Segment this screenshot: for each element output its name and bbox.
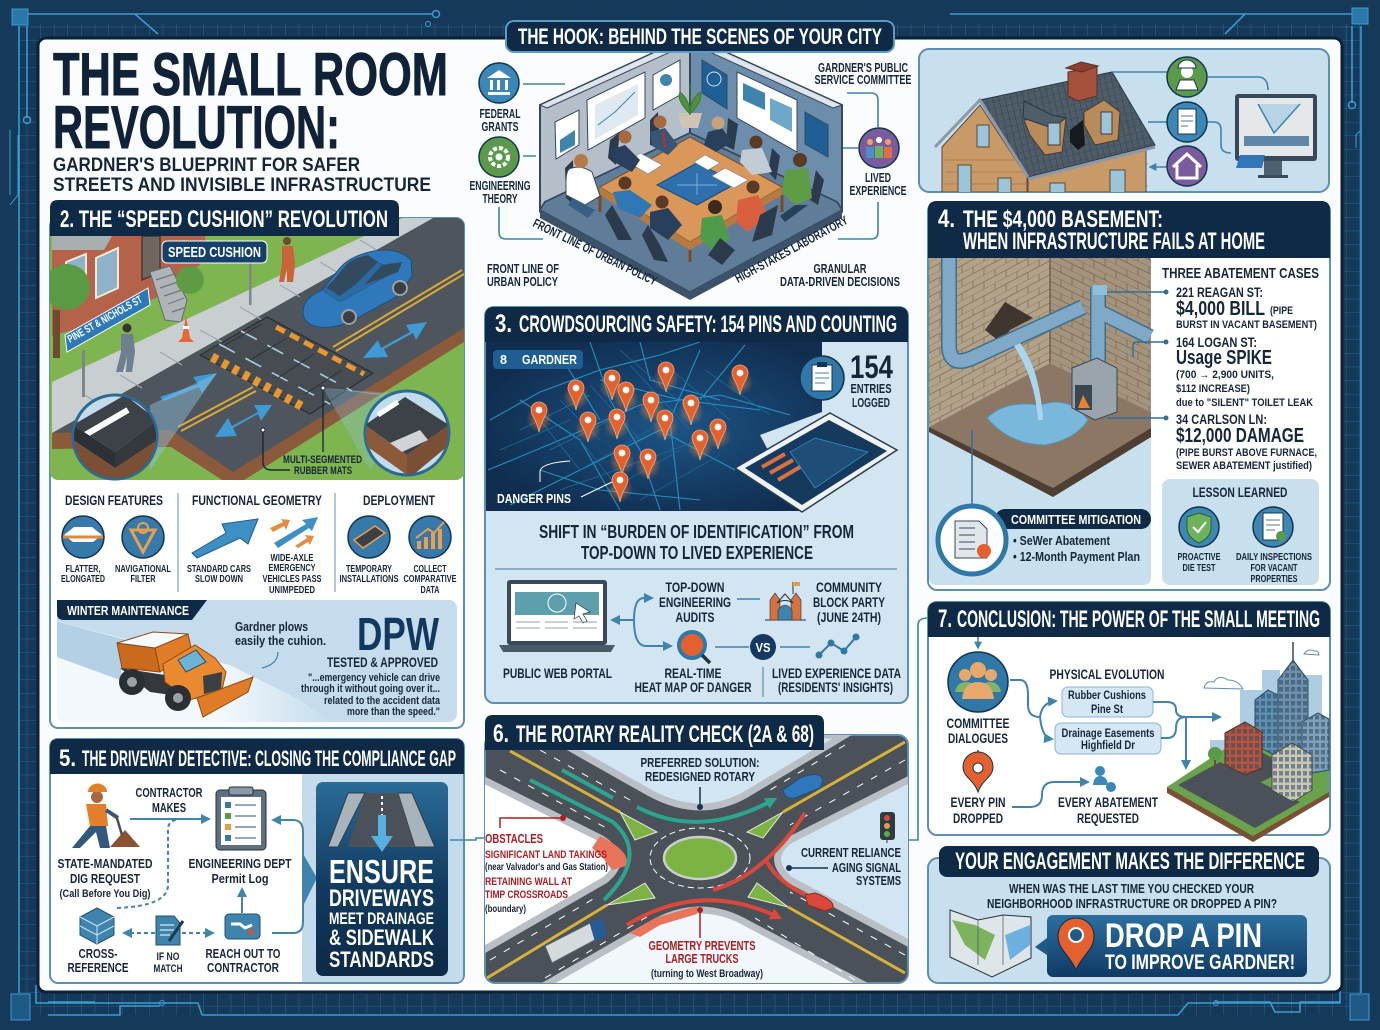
header: conclusion: 7. [938,605,952,633]
icon: document and pen [156,916,183,945]
angled labels [531,213,851,289]
panel: winter maintenance: Gardner plows [235,619,308,634]
illustration: isometric meeting room [531,36,851,300]
abatement cases: (PIPE [1270,305,1293,317]
panel: winter maintenance: easily the cuhion. [235,633,326,648]
obstacles callout: OBSTACLES [485,831,543,846]
pedestrians and cone [116,237,295,372]
plant [678,84,702,128]
column: functional geometry [178,492,335,596]
icon: community block party: COMMUNITY [816,580,882,595]
icon: federal grants: FEDERAL [480,106,521,121]
snow plow truck [117,632,253,717]
column: design features: FILTER [130,573,156,585]
lesson learned: FOR VACANT [1250,562,1298,574]
stat: 154 entries: 154 [850,349,893,385]
icon: blue car [303,250,412,327]
versus badge [750,634,776,660]
icon: abatement request: REQUESTED [1077,811,1139,826]
hook labels: SERVICE COMMITTEE [814,73,912,87]
street illustration [44,218,464,487]
panel: roof and inspection [919,49,1329,195]
column: deployment: INSTALLATIONS [340,573,398,585]
title: REVOLUTION: [53,94,340,161]
obstacles callout: SIGNIFICANT LAND TAKINGS [485,849,607,861]
column: functional geometry: SLOW DOWN [195,573,243,585]
mat leader lines and label: RUBBER MATS [294,465,352,477]
icon: engineering theory: ENGINEERING [470,178,530,193]
preferred solution label [640,755,760,810]
signal callout: AGING SIGNAL [832,860,901,875]
icon: monitor with chart [1235,94,1317,178]
header: rotary: THE ROTARY REALITY CHECK (2A & 68) [516,721,814,748]
flow labels: Permit Log [212,871,269,886]
signal callout: CURRENT RELIANCE [801,845,901,860]
panel: engagement call to action [928,846,1330,983]
icon: report [1167,102,1207,142]
street sign: PINE ST & NICHOLS ST [66,294,145,346]
banner: the hook: THE HOOK: BEHIND THE SCENES OF YOUR CITY [518,24,882,49]
icon: database cube [80,908,114,944]
mat leader lines and label: MULTI-SEGMENTED [283,454,362,466]
icon: permit clipboard [216,787,266,850]
column: deployment: COLLECT [414,563,447,575]
hook labels: GARDNER'S PUBLIC [818,61,908,75]
label: top-down audits: AUDITS [676,610,714,625]
header: rotary: 6. [493,720,509,748]
column: design features: DESIGN FEATURES [65,492,163,508]
flow labels: REACH OUT TO [206,946,280,961]
obstacles callout: (near Valvador's and Gas Station) [485,862,608,873]
panel: winter maintenance: related to the accident data [324,695,441,707]
panel: crowdsourcing safety [485,307,908,703]
geometry callout: GEOMETRY PREVENTS [648,938,756,953]
hook labels: GRANULAR [814,261,867,276]
lesson learned: LESSON LEARNED [1192,484,1288,500]
header: crowdsourcing: CROWDSOURCING SAFETY: 154 PINS AND COUNTING [519,311,897,338]
icon: lived experience: LIVED [865,170,891,185]
flow labels: STATE-MANDATED [58,856,152,871]
label: top-down audits [659,580,731,625]
flow labels: CONTRACTOR [207,960,279,975]
geometry callout: LARGE TRUCKS [666,951,739,966]
burden statement [539,522,854,563]
panel: winter maintenance [57,600,457,722]
icon: community block party: BLOCK PARTY [813,595,885,610]
icon: folded map [950,910,1031,977]
danger pin map: GARDNER [522,352,578,367]
abatement cases: $4,000 BILL [1176,298,1265,320]
versus badge: VS [756,640,771,655]
preferred solution label: PREFERRED SOLUTION: [640,755,760,770]
header: crowdsourcing [485,307,908,342]
icon: committee dialogues: COMMITTEE [946,716,1010,731]
abatement cases: SEWER ABATEMENT justified) [1176,460,1312,472]
inspection connectors [1112,72,1268,167]
icon: community block party [765,580,885,625]
label: top-down audits: TOP-DOWN [666,580,724,595]
panel: winter maintenance: TESTED & APPROVED [327,654,438,670]
panel: conclusion [928,602,1330,842]
signal callout: SYSTEMS [856,873,901,888]
physical evolution: PHYSICAL EVOLUTION [1050,667,1164,682]
red route arrows [627,813,813,925]
header: driveway detective: 5. [59,745,76,772]
icon: lived experience data [772,634,901,695]
connectors around the room [499,84,878,239]
flow connectors [978,680,1220,807]
icon: worker digging [72,784,140,848]
header: basement: 4. [938,205,955,233]
committee mitigation: COMMITTEE MITIGATION [1011,512,1141,527]
title: THE SMALL ROOM [53,41,448,108]
header: driveway detective: THE DRIVEWAY DETECTIVE: CLOSING THE COMPLIANCE GAP [82,746,456,771]
abatement cases: Usage SPIKE [1176,347,1272,369]
column: functional geometry: WIDE-AXLE [270,552,314,564]
column: design features [61,492,171,585]
icon: lived experience [850,128,907,198]
icon: home [1167,146,1207,186]
physical evolution: Drainage Easements [1062,726,1155,740]
icon: inspector [1167,57,1207,97]
question: NEIGHBORHOOD INFRASTRUCTURE OR DROPPED A PIN? [987,897,1277,911]
abatement cases: due to "SILENT" TOILET LEAK [1176,397,1313,409]
stat: 154 entries: ENTRIES [850,381,892,396]
icon: lived experience data: LIVED EXPERIENCE DATA [772,665,901,681]
panel: driveway detective [50,739,464,983]
obstacles callout [485,815,608,915]
mat leader lines and label [261,386,362,477]
header: rotary [485,715,824,750]
teal route arrows [530,770,773,900]
title: STREETS AND INVISIBLE INFRASTRUCTURE [53,175,431,196]
icon: pin dropped [950,752,1006,826]
hook labels [487,61,912,289]
callout: ensure driveways: ENSURE [329,853,434,890]
header: basement [928,201,1330,258]
icon: public web portal [499,580,615,681]
flow labels: MATCH [154,963,183,975]
column: deployment [340,492,456,596]
hook labels: URBAN POLICY [487,274,558,289]
callout: ensure driveways [316,782,448,976]
danger pin map: DANGER PINS [497,491,571,506]
question [987,882,1277,911]
icon: community block party: (JUNE 24TH) [817,610,881,625]
abatement cases: 221 REAGAN ST: [1176,285,1263,300]
obstacles callout: (boundary) [485,904,526,915]
speed cushion label: SPEED CUSHION [168,244,261,261]
callout: ensure driveways: DRIVEWAYS [329,885,434,912]
icon: abatement request [1058,766,1159,826]
lesson learned: DAILY INSPECTIONS [1236,551,1312,563]
panel: the $4,000 basement [928,201,1330,590]
signal callout [786,845,901,888]
physical evolution [1050,667,1164,754]
callout: ensure driveways: & SIDEWALK [329,925,434,950]
tablet [735,413,897,512]
lesson learned: DIE TEST [1182,562,1216,574]
column: deployment: COMPARATIVE [404,573,456,585]
icon: pin dropped: EVERY PIN [950,795,1006,810]
back row chairs [565,112,824,205]
basement illustration [929,258,1151,497]
flow labels: CROSS- [78,946,118,961]
abatement cases: $112 INCREASE) [1176,383,1250,395]
column: functional geometry: FUNCTIONAL GEOMETRY [192,492,322,508]
header: conclusion [928,602,1330,637]
angled labels: HIGH-STAKES LABORATORY [733,213,851,286]
flow arrows [117,819,303,933]
icon: heat map magnifier: REAL-TIME [664,665,722,681]
preferred solution label: REDESIGNED ROTARY [645,769,755,784]
flow labels: IF NO [156,951,180,963]
callout: ensure driveways: MEET DRAINAGE [329,909,434,928]
icon: handshake [225,914,260,939]
geometry callout: (turning to West Broadway) [651,968,763,980]
table [600,137,782,262]
danger pin map [486,342,822,511]
stat: 154 entries [800,349,893,410]
title: GARDNER'S BLUEPRINT FOR SAFER [53,155,360,176]
panel: rotary reality check [480,715,912,988]
detail lens left [73,373,217,480]
shift flow arrows [612,598,671,646]
vehicles [545,774,833,963]
label: top-down audits: ENGINEERING [659,595,731,610]
illustration: isometric city [1167,642,1329,842]
callout: ensure driveways: STANDARDS [329,947,434,972]
hook labels: DATA-DRIVEN DECISIONS [780,274,900,289]
land taking areas [592,836,697,937]
column: deployment: DATA [420,584,440,596]
header: speed cushion [50,200,399,236]
stat: 154 entries: LOGGED [852,395,890,410]
header: crowdsourcing: 3. [495,310,512,338]
callout: drop a pin [1035,915,1307,977]
abatement cases: THREE ABATEMENT CASES [1162,265,1319,282]
column: design features: NAVIGATIONAL [115,563,171,575]
abatement cases: (700 → 2,900 UNITS, [1176,369,1274,381]
panel: speed cushion revolution [44,200,464,728]
committee mitigation [938,430,1151,574]
icon: abatement request: EVERY ABATEMENT [1058,795,1159,810]
lesson learned [1162,479,1319,585]
hook labels: FRONT LINE OF [487,261,559,276]
column: deployment: DEPLOYMENT [363,492,435,508]
flow labels: MAKES [152,801,186,815]
icon: federal grants [479,63,521,134]
physical evolution: Highfield Dr [1081,738,1135,752]
speed cushion label [162,241,267,305]
seated committee members [566,116,812,265]
icon: federal grants: GRANTS [482,119,519,134]
panel: winter maintenance: more than the speed." [347,706,440,718]
icon: pin dropped: DROPPED [953,811,1003,826]
burden statement: TOP-DOWN TO LIVED EXPERIENCE [581,543,813,563]
panel: winter maintenance: WINTER MAINTENANCE [67,603,189,618]
obstacles callout: RETAINING WALL AT [485,876,572,888]
rotary intersection [480,735,912,988]
abatement cases: BURST IN VACANT BASEMENT) [1176,319,1317,331]
abatement cases: $12,000 DAMAGE [1176,425,1304,447]
icon: lived experience data: (RESIDENTS' INSIGHTS) [778,679,893,695]
icon: heat map magnifier [634,632,752,695]
icon: public web portal: PUBLIC WEB PORTAL [503,665,612,681]
icon: engineering theory: THEORY [482,191,518,206]
icon: engineering theory [470,137,530,206]
column: functional geometry: STANDARD CARS [187,563,251,575]
illustration: house with damaged roof [935,62,1155,195]
lesson learned: PROACTIVE [1178,551,1220,563]
double arrows [160,322,427,437]
street sign [65,288,150,397]
header: driveway detective [50,739,464,774]
panel: winter maintenance: "...emergency vehicle can drive [308,672,440,684]
callout: drop a pin: TO IMPROVE GARDNER! [1105,951,1295,974]
flow labels: DIG REQUEST [70,871,140,886]
detail lens right [323,388,449,480]
wall charts [555,60,828,159]
banner: the hook [506,21,894,52]
geometry callout [648,907,763,980]
icon: lived experience: EXPERIENCE [850,183,907,198]
header: basement: THE $4,000 BASEMENT: [963,206,1163,233]
column: functional geometry: VEHICLES PASS [262,573,322,585]
icon: committee dialogues: DIALOGUES [948,731,1008,746]
committee mitigation: • 12-Month Payment Plan [1013,550,1140,564]
flow labels: CONTRACTOR [136,786,202,800]
physical evolution: Rubber Cushions [1068,688,1146,702]
panel: winter maintenance: through it without going over it... [301,683,440,695]
committee mitigation: • SeWer Abatement [1013,534,1111,548]
flow labels: REFERENCE [68,960,129,975]
column: design features: FLATTER, [66,563,101,575]
column: deployment: TEMPORARY [346,563,392,575]
obstacles callout: TIMP CROSSROADS [485,889,568,901]
header: speed cushion: 2. THE “SPEED CUSHION” REVOLUTION [60,206,388,233]
traffic light [880,812,895,843]
danger pin map: 8 [500,352,507,367]
title [53,41,448,196]
flow labels: (Call Before You Dig) [60,888,151,900]
angled labels: FRONT LINE OF URBAN POLICY [531,216,659,289]
question: WHEN WAS THE LAST TIME YOU CHECKED YOUR [1009,882,1254,896]
physical evolution: Pine St [1091,702,1123,716]
abatement cases: 164 LOGAN ST: [1176,335,1257,350]
lesson learned: PROPERTIES [1250,573,1298,585]
column: functional geometry: EMERGENCY [268,562,316,574]
burden statement: SHIFT IN “BURDEN OF IDENTIFICATION” FROM [539,522,854,542]
column: design features: ELONGATED [61,573,105,585]
abatement cases [1107,265,1319,472]
column: functional geometry: UNIMPEDED [269,584,315,596]
panel: winter maintenance: DPW [357,608,439,660]
icon: heat map magnifier: HEAT MAP OF DANGER [634,679,752,695]
callout: drop a pin: DROP A PIN [1105,917,1262,955]
flow labels: ENGINEERING DEPT [188,856,292,871]
icon: committee dialogues [946,637,1010,746]
abatement cases: 34 CARLSON LN: [1176,412,1267,427]
abatement cases: (PIPE BURST ABOVE FURNACE, [1176,447,1317,459]
flow labels [58,786,292,975]
